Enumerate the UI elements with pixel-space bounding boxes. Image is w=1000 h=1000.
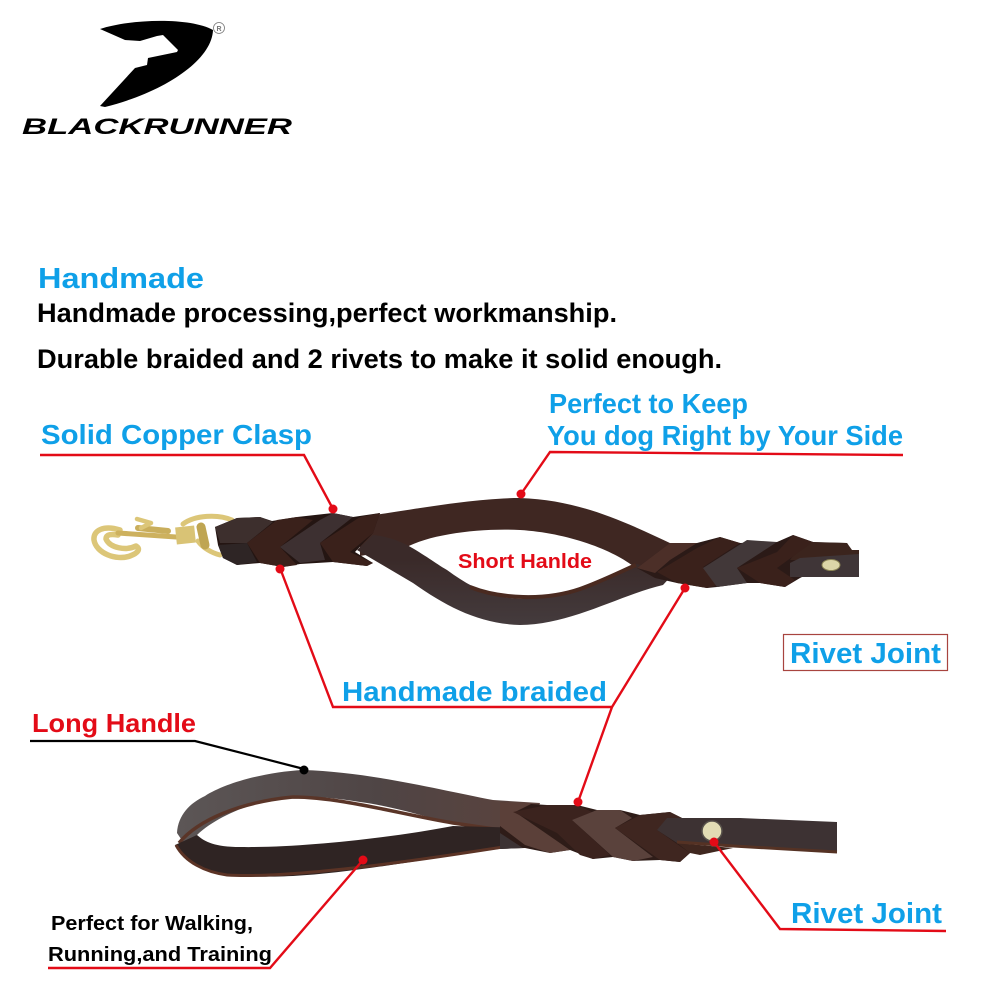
heading: Handmade: Handmade <box>38 263 204 295</box>
callout: Long Handle <box>30 708 308 774</box>
logo wordmark: BLACKRUNNER <box>22 114 292 139</box>
braid: long leash <box>500 802 690 862</box>
callout: Perfect for Walking <box>48 856 368 968</box>
top strap: short handle <box>360 498 672 572</box>
registered mark: R <box>216 26 222 33</box>
braid base <box>500 802 690 862</box>
callout: Perfect to Keep <box>516 388 903 498</box>
rivet <box>822 560 840 570</box>
callout: Perfect to Keep: Perfect to Keep <box>549 388 748 419</box>
boxed label: Rivet Joint: Rivet Joint <box>790 638 941 670</box>
leather edge of top strap <box>179 797 515 843</box>
braid: right with tail <box>637 535 859 588</box>
tail strap <box>657 818 837 853</box>
text block: description: Durable braided and 2 rivets to make it solid enough. <box>37 344 722 374</box>
callout: Solid Copper Clasp: Solid Copper Clasp <box>41 419 312 450</box>
callout: Solid Copper Clasp <box>40 419 338 514</box>
leather rim of bottom strap <box>176 843 530 875</box>
short leash <box>94 498 859 625</box>
logo: Blackrunner <box>22 21 292 139</box>
label: Short Handle: Short Hanlde <box>458 551 592 573</box>
registered mark <box>214 22 224 34</box>
callout: Perfect for Walking: Running,and Training <box>48 944 272 966</box>
callout: Rivet Joint: Rivet Joint <box>791 898 942 930</box>
leather rim: short handle <box>470 565 636 597</box>
braid base <box>637 535 852 588</box>
braid: left <box>215 513 380 567</box>
rivet <box>702 821 722 841</box>
icon: brass clasp <box>94 516 232 558</box>
tail strap top <box>790 542 859 560</box>
callout: Handmade braided <box>276 564 690 806</box>
callout: Perfect for Walking: Perfect for Walking, <box>51 913 253 935</box>
strap under tail <box>677 843 733 855</box>
bottom strap: short handle <box>357 535 675 625</box>
tail leather edge <box>677 842 837 852</box>
top strap: long handle <box>177 770 540 845</box>
callout: Long Handle: Long Handle <box>32 708 196 738</box>
icon: panther emblem <box>100 21 213 107</box>
bottom strap: long handle <box>175 826 530 877</box>
text block: description <box>37 298 722 374</box>
callout: Handmade braided: Handmade braided <box>342 676 607 707</box>
text block: description: Handmade processing,perfect workmanship. <box>37 298 617 328</box>
long leash <box>175 770 837 877</box>
callout: Rivet Joint <box>710 838 946 931</box>
callout: Perfect to Keep: You dog Right by Your Side <box>547 420 903 451</box>
tail strap <box>790 554 859 577</box>
